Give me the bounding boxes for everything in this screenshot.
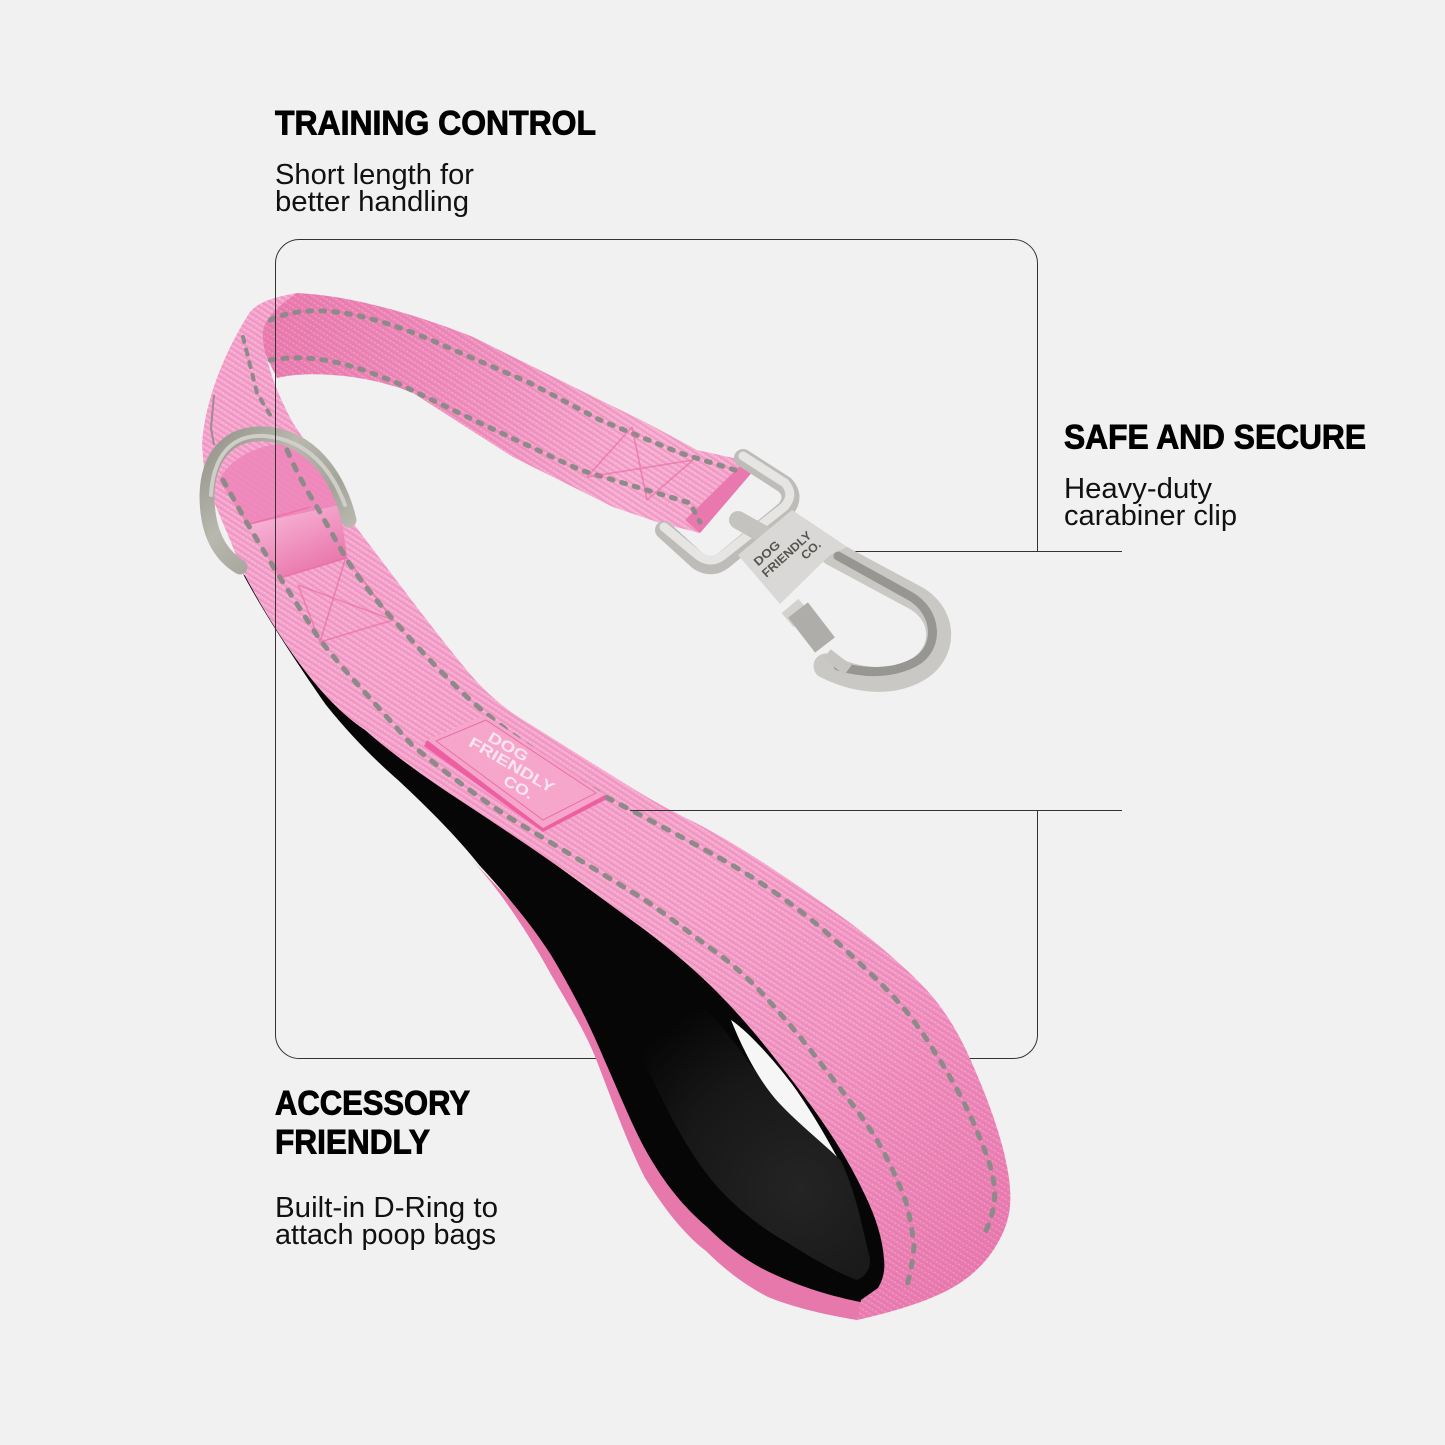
gap through loop bbox=[731, 1020, 837, 1157]
folded strap band bbox=[247, 505, 347, 578]
upper strap stitching bbox=[270, 311, 735, 470]
text: training control description: Short length for bbox=[275, 159, 475, 191]
text: safe and secure description: carabiner clip bbox=[1064, 500, 1237, 532]
patch text: DOG bbox=[485, 729, 531, 766]
swivel pin bbox=[738, 520, 770, 538]
heading: accessory friendly: FRIENDLY bbox=[275, 1124, 430, 1162]
D-ring bbox=[207, 434, 349, 567]
dark end fold at swivel bbox=[685, 461, 754, 533]
heading: training control: TRAINING CONTROL bbox=[275, 104, 596, 142]
clip body text: CO. bbox=[798, 537, 824, 562]
carabiner clip bbox=[664, 456, 939, 679]
patch text: CO. bbox=[500, 772, 536, 803]
patch text: FRIENDLY bbox=[466, 734, 557, 797]
strap section under ring bbox=[219, 444, 345, 525]
clip body text: FRIENDLY bbox=[759, 528, 814, 580]
lower edge stitching bbox=[223, 480, 914, 1288]
callout frame: left edge over strap bbox=[275, 263, 300, 1058]
leash illustration bbox=[202, 293, 1010, 1320]
heading: safe and secure: SAFE AND SECURE bbox=[1064, 418, 1366, 456]
front strap and handle bbox=[202, 293, 1010, 1320]
back of handle loop bbox=[470, 858, 890, 1320]
hook bbox=[826, 553, 939, 679]
clip body bbox=[738, 510, 847, 604]
heading: accessory friendly: ACCESSORY bbox=[275, 1084, 470, 1122]
text: safe and secure description: Heavy-duty bbox=[1064, 473, 1213, 505]
text: accessory friendly description: attach poop bags bbox=[275, 1219, 496, 1251]
black neoprene padding bbox=[243, 574, 900, 1303]
neoprene inner highlight bbox=[625, 996, 870, 1280]
text: accessory friendly description: Built-in D-Ring to bbox=[275, 1192, 498, 1224]
upper strap bbox=[258, 293, 754, 533]
upper edge stitching bbox=[287, 450, 995, 1235]
clip body text: DOG bbox=[751, 538, 783, 569]
upper box stitching bbox=[587, 427, 693, 500]
branded patch bbox=[424, 715, 605, 832]
callout frame: top and right connector to carabiner bbox=[276, 239, 1122, 552]
callout frame: lower right and bottom bbox=[299, 810, 1038, 1059]
gate cylinder bbox=[790, 606, 802, 620]
callout connector to strap bbox=[630, 810, 1122, 812]
swivel loop bbox=[664, 458, 790, 565]
left grey stitch on fold bbox=[243, 337, 272, 418]
magenta box stitching bbox=[247, 507, 393, 642]
text: training control description: better handling bbox=[275, 186, 469, 218]
